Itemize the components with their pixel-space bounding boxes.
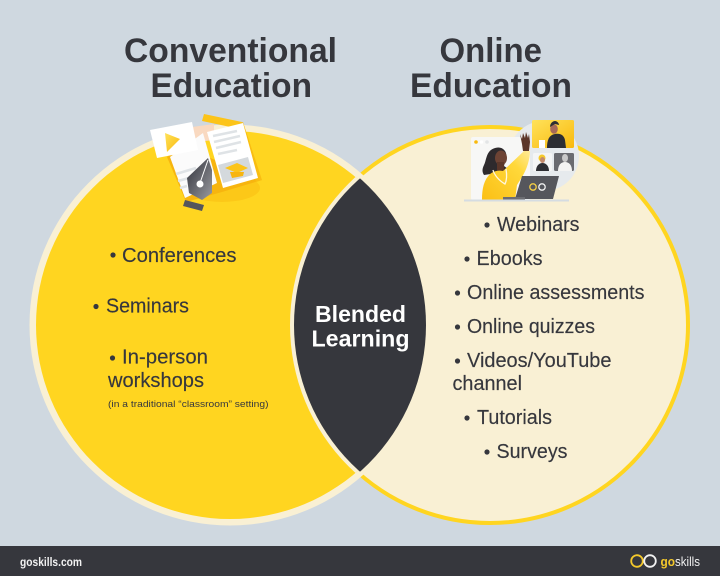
video tile: man bbox=[532, 120, 574, 148]
lines on left page bbox=[176, 168, 196, 188]
backdrop blob bbox=[509, 121, 579, 191]
left page bbox=[170, 133, 217, 198]
circle: online education bbox=[292, 127, 688, 523]
goskills logo bbox=[631, 555, 700, 569]
list: conventional education: Seminars bbox=[106, 296, 189, 318]
circle: conventional education bbox=[30, 124, 430, 526]
list: online education: Surveys bbox=[496, 441, 568, 463]
heading: Online Education: Education bbox=[410, 67, 572, 105]
footer url: goskills.com bbox=[20, 555, 82, 569]
heading: Conventional Education bbox=[124, 32, 337, 105]
necklace bbox=[493, 169, 507, 184]
icon: book, pen and video card bbox=[150, 114, 262, 211]
app window bbox=[471, 137, 530, 200]
video tile: woman with blonde hair bbox=[533, 153, 552, 171]
list: online education: Videos/YouTube bbox=[467, 350, 612, 372]
list: conventional education: Conferences bbox=[122, 245, 236, 267]
list: online education: Webinars bbox=[497, 214, 580, 236]
list: online education: Online quizzes bbox=[467, 316, 595, 338]
back cover bbox=[167, 145, 262, 202]
desk line bbox=[464, 200, 569, 202]
play triangle bbox=[165, 133, 180, 152]
footer bar bbox=[0, 546, 720, 576]
video card bbox=[150, 122, 198, 158]
list: online education: Online assessments bbox=[467, 282, 644, 304]
heading: Online Education: Online bbox=[440, 32, 542, 70]
woman hair bbox=[482, 148, 511, 175]
list: conventional education bbox=[93, 245, 269, 410]
right page bbox=[207, 123, 258, 188]
video tile: older man bbox=[554, 153, 574, 171]
laptop logo bbox=[530, 184, 536, 190]
goskills logo: go bbox=[660, 555, 675, 569]
overlap: blended learning bbox=[290, 177, 426, 473]
ruler bbox=[202, 114, 242, 129]
pen base bbox=[183, 200, 204, 211]
raised hand bbox=[520, 132, 530, 151]
list: online education bbox=[452, 214, 644, 463]
woman body bbox=[482, 151, 530, 200]
peach inner page edge bbox=[192, 124, 214, 142]
list: conventional education: (in a traditional “classroom” setting) bbox=[108, 399, 268, 410]
pen nib bbox=[187, 158, 212, 200]
icon: video call bbox=[464, 120, 579, 202]
image block with graduation cap bbox=[218, 157, 253, 183]
goskills logo: skills bbox=[675, 555, 700, 569]
overlap: blended learning: Learning bbox=[312, 326, 410, 352]
book shadow glow bbox=[184, 174, 260, 202]
heading: Online Education bbox=[410, 32, 572, 105]
list: conventional education: workshops bbox=[107, 370, 204, 392]
list: conventional education: In-person bbox=[122, 346, 208, 368]
overlap: blended learning: Blended bbox=[315, 301, 406, 327]
text lines on right page bbox=[213, 131, 241, 154]
list: online education: Tutorials bbox=[477, 407, 552, 429]
heading: Conventional Education: Conventional bbox=[124, 32, 337, 70]
list: online education: channel bbox=[452, 373, 522, 395]
woman face bbox=[495, 150, 507, 166]
laptop bbox=[515, 176, 559, 199]
list: online education: Ebooks bbox=[476, 248, 542, 270]
heading: Conventional Education: Education bbox=[150, 67, 312, 105]
